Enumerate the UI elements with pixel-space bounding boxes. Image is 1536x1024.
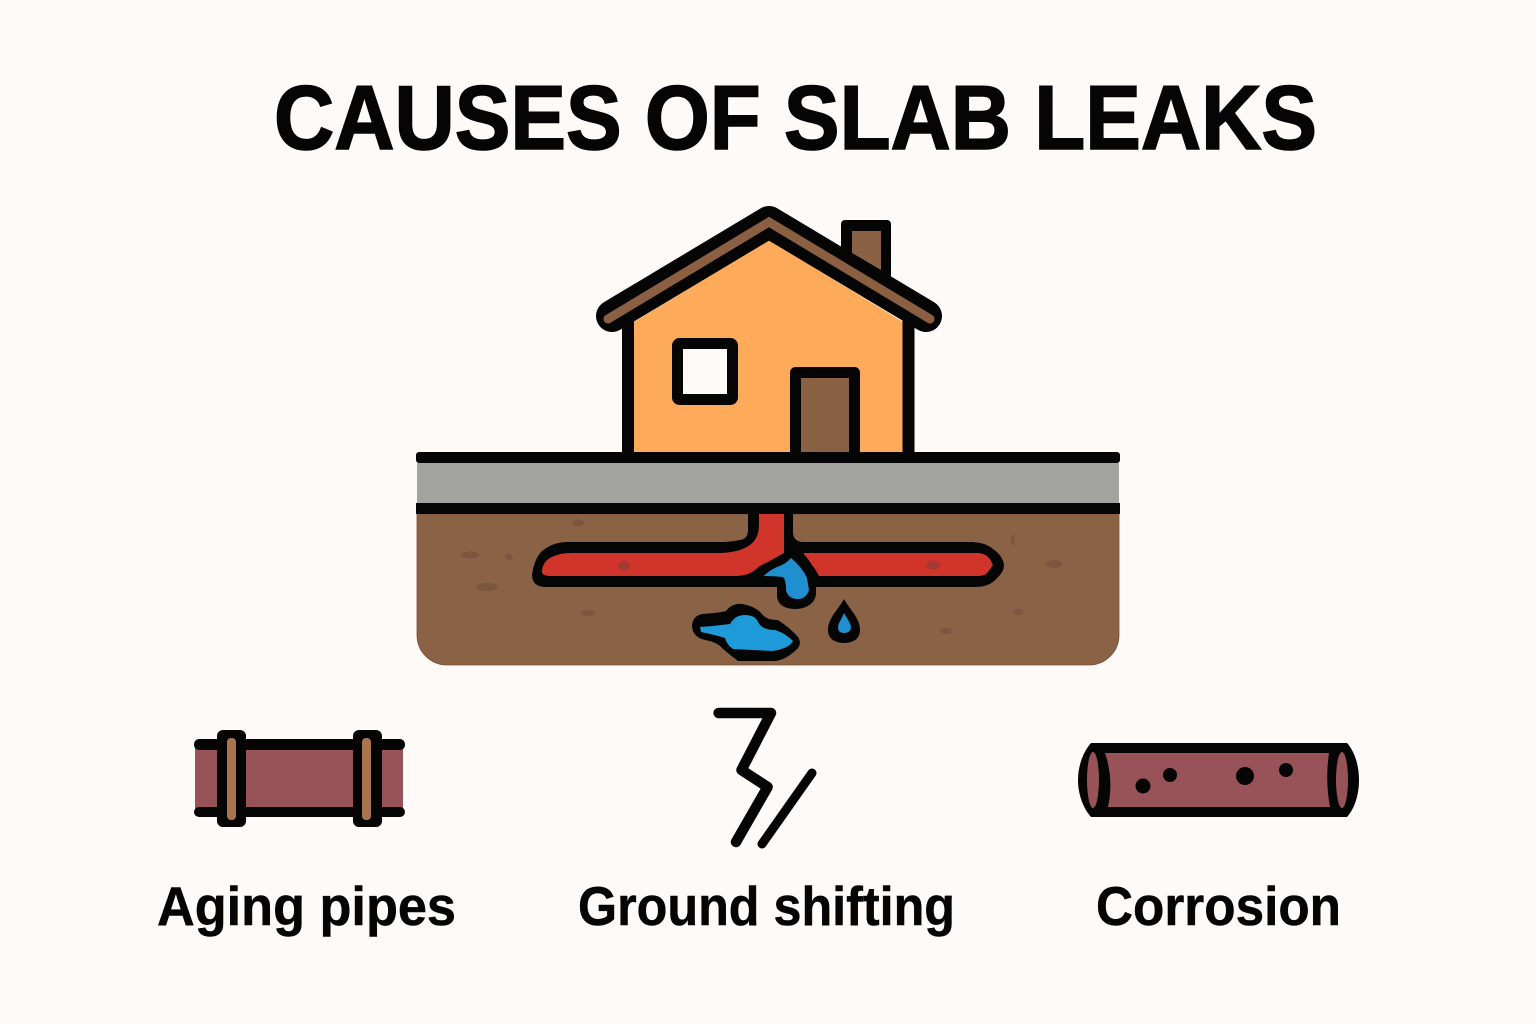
soil speckles bbox=[461, 520, 1062, 634]
slab lower edge bbox=[416, 503, 1120, 514]
illustration: house on slab with leaking pipe bbox=[416, 220, 1120, 665]
cause: corrosion bbox=[1078, 743, 1359, 937]
rust spots bbox=[618, 560, 940, 571]
pipe right section bbox=[803, 553, 993, 576]
wall outlines bbox=[628, 318, 908, 456]
icon: ground crack bbox=[719, 713, 812, 844]
house walls bbox=[634, 240, 903, 452]
icon: aging pipe bbox=[194, 730, 405, 827]
icon: corroded pipe bbox=[1078, 743, 1359, 817]
house bbox=[608, 220, 930, 456]
cause: ground shifting bbox=[578, 713, 955, 937]
title: CAUSES OF SLAB LEAKS bbox=[274, 68, 1317, 169]
roof bbox=[608, 222, 930, 319]
water droplet bbox=[828, 599, 860, 643]
concrete slab bbox=[416, 452, 1120, 503]
chimney bbox=[841, 220, 891, 290]
pipe outline bbox=[532, 512, 1004, 609]
soil bbox=[417, 514, 1119, 665]
pipe left section bbox=[542, 514, 784, 576]
underground pipe with crack bbox=[532, 512, 1004, 609]
cause: aging pipes bbox=[157, 730, 456, 937]
water puddle bbox=[692, 604, 800, 661]
leaking water bbox=[764, 558, 809, 599]
window bbox=[678, 344, 732, 400]
label: aging pipes: Aging pipes bbox=[157, 875, 456, 937]
label: corrosion: Corrosion bbox=[1096, 875, 1341, 937]
door bbox=[796, 372, 854, 456]
label: ground shifting: Ground shifting bbox=[578, 875, 955, 937]
